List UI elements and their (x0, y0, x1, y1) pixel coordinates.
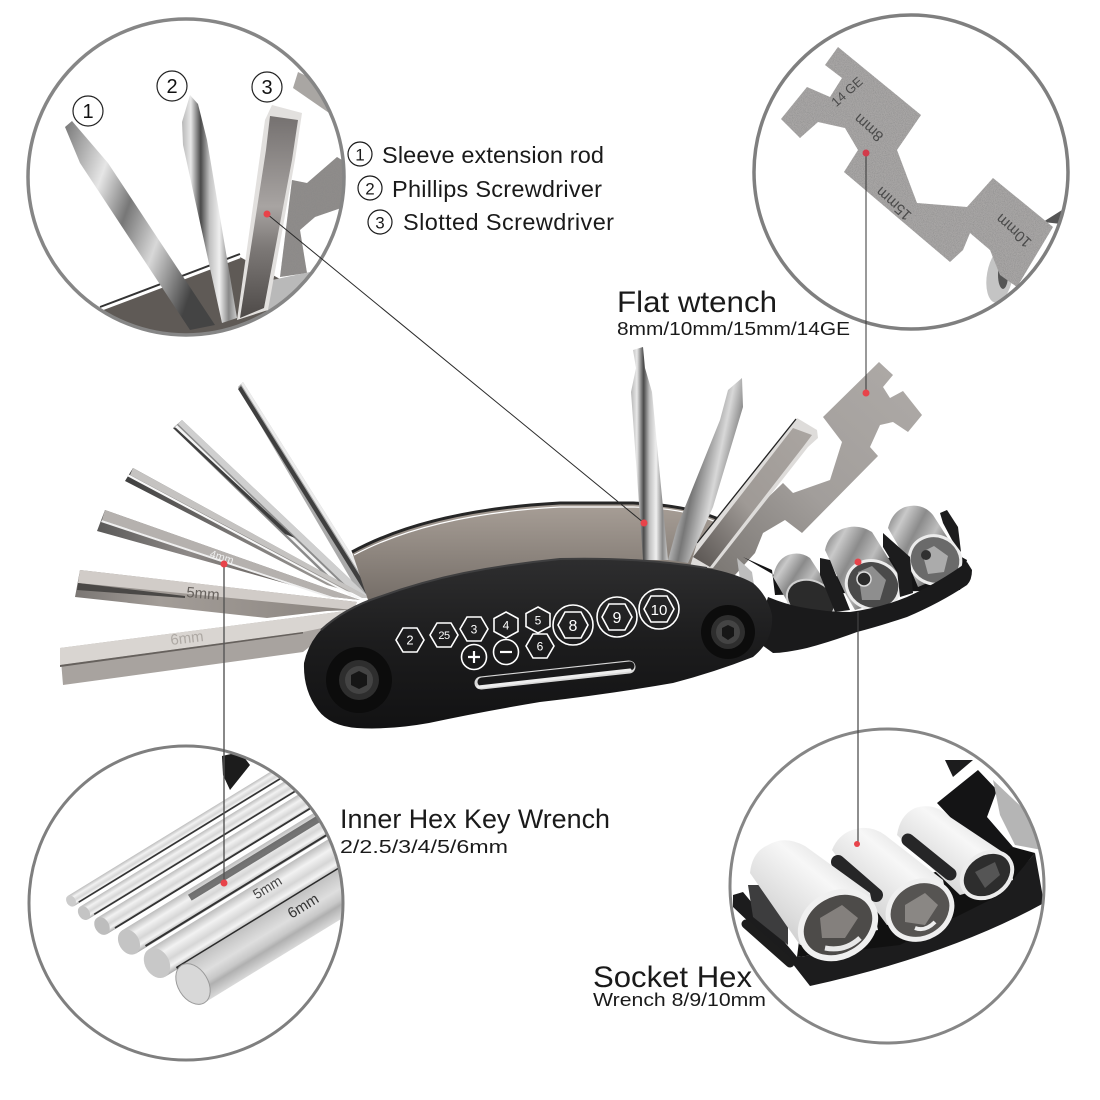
size icon 5 (526, 607, 550, 633)
hex key 3mm (125, 468, 370, 598)
tool body (304, 559, 772, 728)
leader: hex keys (220, 560, 228, 886)
marker 1: 1 (82, 101, 94, 123)
flat wrench (695, 362, 922, 575)
socket crop (986, 210, 1062, 302)
socket 8mm (773, 554, 842, 628)
size icon 5: 5 (535, 614, 542, 628)
leader: sockets (854, 558, 862, 847)
hex key 4mm (97, 510, 360, 600)
legend line 1: 1 (355, 146, 365, 164)
marker 2: 2 (166, 76, 178, 98)
size icon 8 (553, 605, 593, 645)
marker 1 (73, 96, 103, 126)
sleeve extension rod (631, 347, 668, 560)
size icon 8: 8 (569, 618, 578, 635)
wrench markings: 8mm (851, 110, 887, 145)
hex key 5mm (75, 570, 357, 618)
size icon 3 (460, 617, 488, 641)
size icon 3: 3 (471, 622, 478, 636)
slotted screwdriver (690, 418, 818, 568)
hex key 6mm (60, 610, 353, 685)
rod 4mm (118, 814, 326, 955)
socket zoom right (897, 806, 1014, 900)
black body crop (222, 752, 250, 790)
backplate crop (100, 253, 279, 334)
wrench markings: 14 GE (828, 74, 866, 110)
wrench crop (266, 72, 342, 311)
text: flat wrench label (617, 286, 850, 339)
rod 6mm (175, 870, 342, 1005)
leader: screwdrivers (264, 210, 648, 526)
size icon 2 (396, 628, 424, 652)
slot (478, 666, 630, 687)
ring (730, 729, 1044, 1043)
socket 9mm (825, 527, 907, 617)
legend line 3: Slotted Screwdriver (403, 209, 614, 235)
socket holder front (755, 562, 972, 653)
hex key 4mm: 4mm (208, 548, 235, 567)
legend line 3: 3 (375, 214, 385, 232)
size icon 9 (597, 597, 637, 637)
legend line 2: Phillips Screwdriver (392, 176, 602, 202)
wrench markings: 15mm (873, 183, 915, 224)
size icon 6 (526, 634, 554, 658)
wrench markings (828, 74, 1035, 251)
rod 6mm: 6mm (285, 890, 322, 922)
rod 2.5mm (78, 782, 296, 920)
socket zoom left (750, 840, 878, 962)
text: socket label: Socket Hex (593, 961, 752, 994)
phillips screwdriver (668, 378, 743, 563)
size icon 4: 4 (503, 618, 510, 632)
legend line 2: 2 (365, 180, 375, 198)
wrench markings: 10mm (993, 210, 1035, 251)
rod 3mm (94, 795, 310, 935)
size icon plus (462, 644, 486, 670)
socket 10mm (888, 506, 968, 591)
rod 2mm (66, 772, 280, 907)
wrench zoom (781, 47, 1053, 287)
marker 3: 3 (261, 77, 273, 99)
panel: screwdrivers close-up (28, 19, 350, 340)
size icon 10: 10 (651, 602, 667, 619)
tooth middle (838, 862, 876, 895)
text: flat wrench label: 8mm/10mm/15mm/14GE (617, 318, 850, 339)
ring (28, 19, 344, 335)
tool 1 zoom (65, 121, 215, 330)
socket zoom middle (832, 828, 954, 942)
size icon minus (494, 640, 518, 664)
panel: hex keys close-up (28, 744, 344, 1062)
bolt right (701, 605, 755, 659)
holder (733, 760, 1044, 986)
text: hex key label (340, 804, 610, 857)
size icon 2: 2 (406, 632, 414, 648)
size icon 9: 9 (613, 610, 622, 627)
size icon 2.5: 25 (438, 630, 450, 642)
tool 3 zoom (237, 105, 302, 320)
ring (29, 746, 343, 1060)
hex key 5mm: 5mm (186, 584, 220, 604)
text: hex key label: 2/2.5/3/4/5/6mm (340, 836, 508, 857)
rubber clip (746, 885, 790, 963)
panel: main multi-tool (60, 347, 972, 728)
text: socket label (593, 961, 766, 1010)
rod 5mm: 5mm (250, 872, 285, 902)
panel: flat wrench close-up (754, 15, 1070, 329)
tooth right (908, 840, 950, 874)
text: socket label: Wrench 8/9/10mm (593, 989, 766, 1010)
size icon 4 (494, 612, 518, 638)
socket holder back (737, 545, 967, 595)
marker 3 (252, 72, 282, 102)
bolt left (326, 647, 392, 713)
panel: sockets close-up (730, 729, 1044, 1043)
text: flat wrench label: Flat wtench (617, 286, 777, 319)
ring (754, 15, 1068, 329)
rod 5mm (144, 840, 338, 978)
leader: flat wrench (862, 150, 870, 396)
size icon 2.5 (430, 623, 458, 647)
tool 2 zoom (182, 95, 237, 323)
marker 2 (157, 71, 187, 101)
legend line 1: Sleeve extension rod (382, 142, 604, 168)
text: screwdriver legend (348, 142, 614, 235)
size icon 10 (639, 589, 679, 629)
text: hex key label: Inner Hex Key Wrench (340, 804, 610, 834)
size icon 6: 6 (537, 640, 544, 654)
hex key 2mm (238, 382, 375, 595)
holder teeth (820, 510, 961, 612)
hex key 6mm: 6mm (169, 628, 205, 649)
back plate (352, 503, 735, 612)
hex key 2.5mm (173, 420, 370, 598)
